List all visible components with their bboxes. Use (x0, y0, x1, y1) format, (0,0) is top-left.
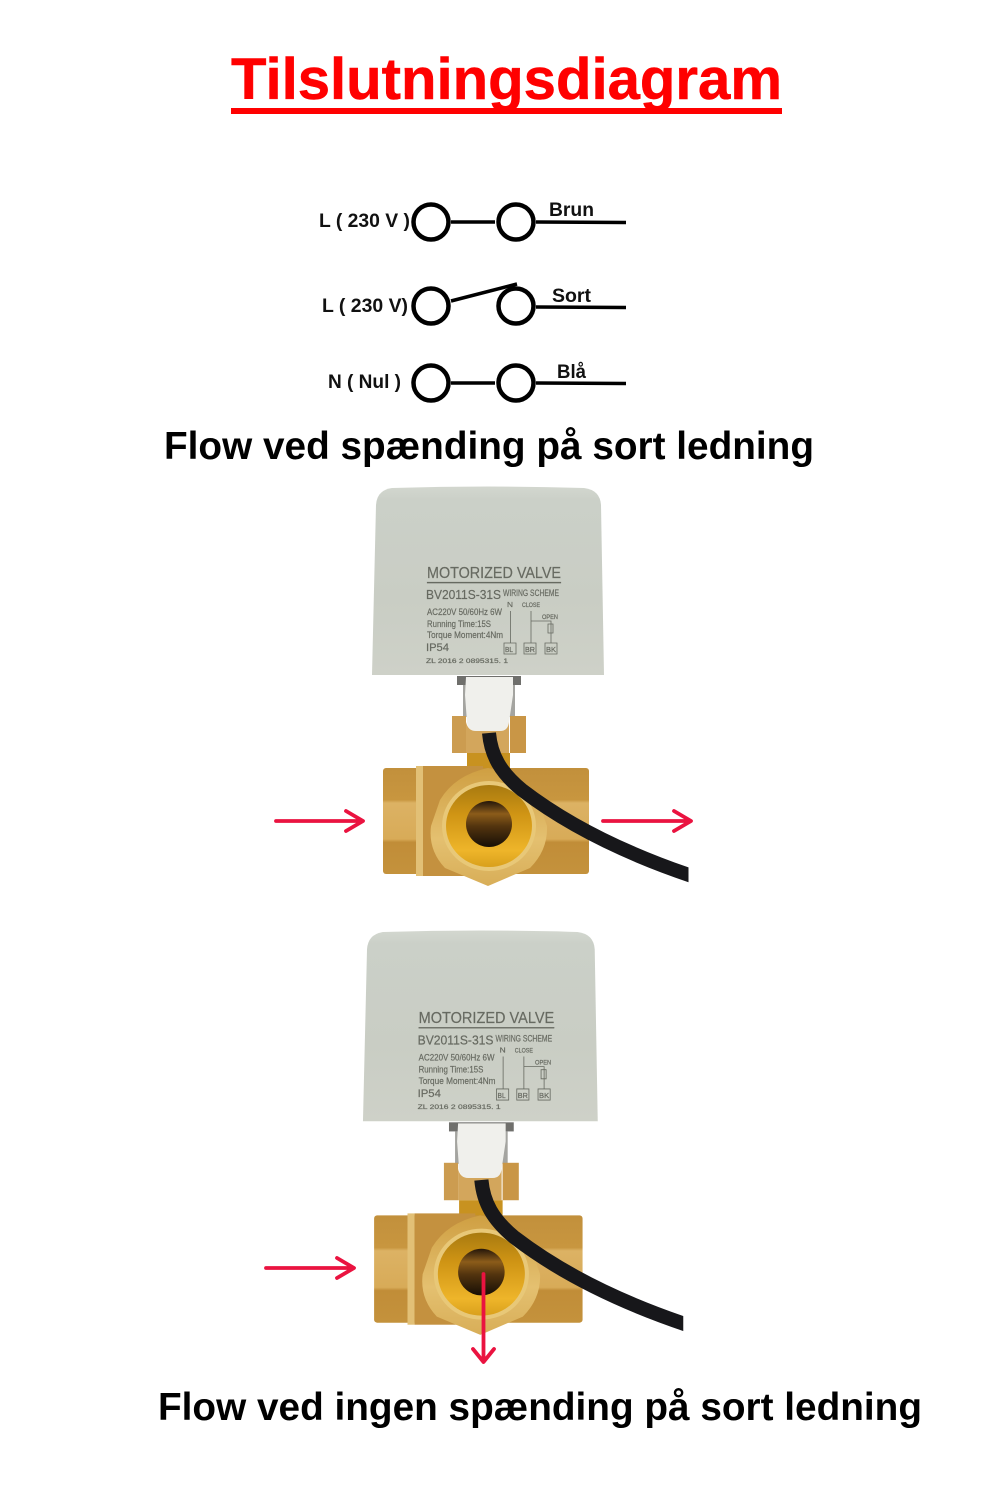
label printed on cover: BR (518, 1092, 528, 1100)
heading: flow with voltage: Flow ved spænding på sort ledning (164, 425, 814, 468)
actuator cover (363, 931, 598, 1121)
label printed on cover: Torque Moment:4Nm (419, 1076, 496, 1087)
label printed on cover: MOTORIZED VALVE (419, 1010, 554, 1027)
wiring diagram (319, 200, 626, 400)
brass body (383, 716, 589, 876)
valve photo: bottom (363, 931, 690, 1335)
wiring row: black wire with switch: Sort (552, 286, 592, 307)
arrow: flow in, bottom valve (266, 1258, 354, 1278)
label printed on cover: BL (498, 1092, 506, 1100)
wiring row: brown wire: Brun (549, 200, 594, 221)
label printed on cover: BK (546, 647, 556, 654)
label printed on cover: Running Time:15S (427, 619, 491, 630)
arrow: flow out down, bottom valve (473, 1274, 494, 1362)
wiring row: blue wire: N ( Nul ) (328, 372, 401, 393)
label printed on cover: IP54 (418, 1088, 441, 1100)
label printed on cover: AC220V 50/60Hz 6W (427, 607, 502, 618)
label printed on cover (426, 565, 561, 665)
wiring row: brown wire (319, 200, 626, 240)
label printed on cover: Running Time:15S (419, 1065, 483, 1076)
front port (431, 768, 547, 886)
label printed on cover: CLOSE (522, 603, 540, 609)
actuator stem (449, 1122, 514, 1178)
wiring row: blue wire (328, 362, 626, 400)
title: Tilslutningsdiagram (231, 47, 782, 112)
arrow: flow in, top valve (276, 811, 363, 831)
label printed on cover: N (500, 1046, 506, 1054)
wiring row: blue wire: Blå (557, 362, 586, 383)
black cable (489, 733, 695, 877)
label printed on cover: BR (525, 647, 535, 654)
front port (422, 1215, 540, 1335)
label printed on cover: MOTORIZED VALVE (427, 565, 561, 582)
label printed on cover: OPEN (542, 615, 558, 621)
brass body (374, 1163, 583, 1325)
label printed on cover: CLOSE (515, 1048, 533, 1054)
label printed on cover: Torque Moment:4Nm (427, 630, 503, 641)
actuator cover (372, 486, 604, 675)
label printed on cover (418, 1010, 554, 1111)
label printed on cover: ZL 2016 2 0895315. 1 (418, 1104, 501, 1111)
label printed on cover: OPEN (535, 1061, 551, 1067)
black cable (481, 1180, 690, 1326)
label printed on cover: BK (539, 1092, 549, 1100)
label printed on cover: BV2011S-31S (418, 1032, 494, 1047)
label printed on cover: BL (505, 647, 513, 654)
heading: flow without voltage: Flow ved ingen spænding på sort ledning (158, 1386, 922, 1429)
wiring row: black wire with switch: L ( 230 V) (322, 296, 408, 317)
label printed on cover: N (507, 602, 513, 609)
wiring row: brown wire: L ( 230 V ) (319, 211, 410, 232)
arrow: flow out right, top valve (603, 811, 691, 831)
label printed on cover: IP54 (426, 642, 449, 654)
valve photo: top (372, 486, 695, 886)
actuator stem (457, 676, 521, 731)
wiring row: black wire with switch (322, 284, 626, 324)
label printed on cover: AC220V 50/60Hz 6W (419, 1053, 495, 1064)
label printed on cover: WIRING SCHEME (496, 1033, 552, 1043)
label printed on cover: BV2011S-31S (426, 587, 501, 602)
label printed on cover: ZL 2016 2 0895315. 1 (426, 658, 508, 665)
label printed on cover: WIRING SCHEME (503, 588, 559, 598)
